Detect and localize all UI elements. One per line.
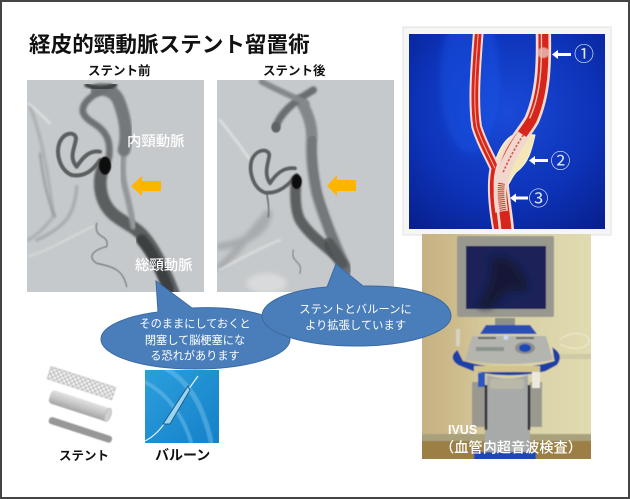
callout text line 1: ステントとバルーンに [299,303,412,316]
number 3: ③ [528,188,548,210]
icon: stents [47,366,116,443]
stent mesh [47,366,116,400]
arrow: marker 1 [552,50,571,59]
callout text line 2: より拡張しています [305,318,406,332]
monitor [457,236,554,327]
heading: after stent: ステント後 [263,63,326,78]
crimped stent [48,416,113,443]
covered stent [48,389,113,422]
callout text line 1: そのままにしておくと [139,318,251,330]
number 2: ② [550,150,570,173]
arrow: stenosis before [131,176,161,196]
control console [454,325,559,374]
icon: balloon catheter [145,368,219,445]
panel: angiogram after stent [217,80,394,293]
heading: before stent: ステント前 [88,63,151,78]
callout: before stent warning [101,281,290,369]
cart column [472,372,542,460]
label: internal carotid: 内頸動脈 [127,133,185,150]
panel: IVUS machine photo [420,232,593,461]
arrow: stented segment after [327,175,356,196]
label: stent: ステント [59,449,109,463]
arrow: marker 2 [529,156,548,165]
panel: stent diagram [403,7,611,235]
title: 経皮的頸動脈ステント留置術 [29,32,310,57]
label: common carotid: 総頸動脈 [135,257,193,274]
callout: after stent explanation [262,264,451,346]
callout text line 2: 閉塞して脳梗塞にな [145,333,245,347]
callout text line 3: る恐れがあります [150,348,240,362]
label: IVUS: IVUS [448,423,477,437]
panel: angiogram before stent [27,80,204,293]
arrow: marker 3 [510,194,528,202]
number 1: ① [574,43,594,66]
label: balloon: バルーン [155,447,210,463]
label: intravascular ultrasound: （血管内超音波検査） [440,440,582,456]
icon: left wall fixture [456,329,460,346]
